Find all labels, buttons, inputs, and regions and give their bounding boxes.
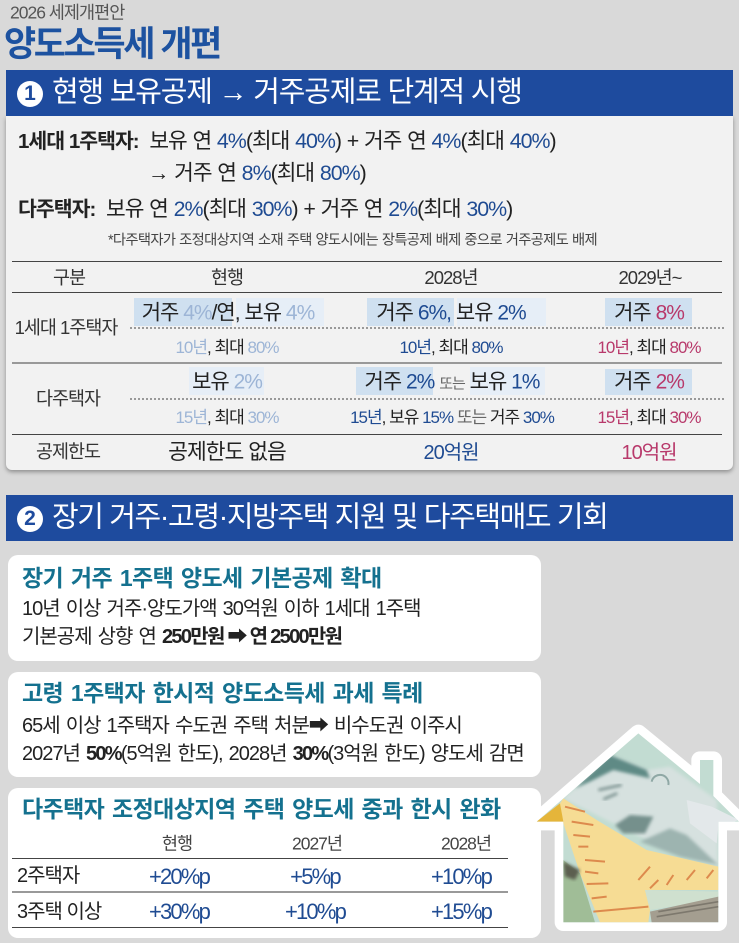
surcharge row label: three or more homes: 3주택 이상 [17, 901, 101, 923]
card: basic deduction [8, 555, 541, 661]
cell: 2029 multi home term: 15년, 최대 30% [597, 408, 701, 427]
surcharge header: 2028: 2028년 [441, 834, 491, 854]
cell: current single home term: 10년, 최대 80% [175, 338, 279, 357]
cell: 2028 single home term: 10년, 최대 80% [399, 338, 503, 357]
section 2 heading: 장기 거주·고령·지방주택 지원 및 다주택매도 기회 [52, 502, 607, 534]
cell: current multi home term: 15년, 최대 30% [175, 408, 279, 427]
section 1 heading: 현행 보유공제 → 거주공제로 단계적 시행 [52, 77, 522, 109]
section 2 header bar [6, 495, 733, 541]
title: 양도소득세 개편 [4, 25, 220, 64]
table header: 2029: 2029년~ [619, 267, 681, 288]
section 1 header bar [6, 70, 733, 116]
card: senior special rule [8, 672, 541, 777]
icon: number 2 [17, 506, 43, 532]
footnote: *다주택자가 조정대상지역 소재 주택 양도시에는 장특공제 배제 중으로 거주공제도 배제 [108, 232, 597, 248]
value: three homes 2027: +10%p [285, 899, 345, 924]
row label: multi home: 다주택자 [36, 388, 100, 409]
card 2 line 2: 2027년 50%(5억원 한도), 2028년 30%(3억원 한도) 양도세 감면 [22, 743, 524, 765]
subtitle: 2026 세제개편안 [10, 2, 124, 22]
cell: 2029 multi home rate: 거주 2% [614, 370, 684, 393]
card 1 line 1: 10년 이상 거주·양도가액 30억원 이하 1세대 1주택 [22, 598, 421, 620]
cell: current multi home rate: 보유 2% [192, 370, 262, 393]
card 1 line 2: 기본공제 상향 연 250만원 ➡ 연 2500만원 [22, 626, 341, 648]
surcharge header: current: 현행 [162, 834, 192, 854]
icon: number 1: 1 [24, 82, 36, 105]
text: single-home result line: → 거주 연 8%(최대 80%) [148, 161, 366, 185]
row label: deduction cap: 공제한도 [36, 441, 100, 462]
panel: section 1 [6, 116, 733, 470]
card 1 heading: 장기 거주 1주택 양도세 기본공제 확대 [22, 565, 382, 591]
cell: 2028 multi home rate: 거주 2% 또는 보유 1% [365, 370, 539, 393]
value: two homes 2027: +5%p [290, 864, 340, 889]
cell: 2028 multi home term: 15년, 보유 15% 또는 거주 30% [350, 408, 554, 427]
text: single-home owner line: 1세대 1주택자: 보유 연 4%(최대 40%) + 거주 연 4%(최대 40%) [18, 129, 556, 153]
surcharge header: 2027: 2027년 [292, 834, 342, 854]
surcharge row label: two homes: 2주택자 [17, 865, 79, 887]
cell: 2028 cap: 20억원 [423, 442, 479, 464]
text: multi-home owner line: 다주택자: 보유 연 2%(최대 30%) + 거주 연 2%(최대 30%) [18, 197, 512, 221]
icon: number 1 [17, 81, 43, 107]
value: two homes 2028: +10%p [431, 864, 491, 889]
cell: current single home rate: 거주 4%/연, 보유 4% [142, 301, 314, 324]
card 2 heading: 고령 1주택자 한시적 양도소득세 과세 특례 [22, 680, 423, 706]
table header: current: 현행 [211, 267, 243, 288]
icon: number 2: 2 [24, 507, 36, 530]
table header: 2028: 2028년 [424, 267, 478, 288]
table header: category: 구분 [53, 267, 85, 288]
value: two homes current: +20%p [149, 864, 209, 889]
cell: 2029 single home term: 10년, 최대 80% [597, 338, 701, 357]
illustration: house with banknote and tape measure [537, 724, 739, 931]
cell: 2028 single home rate: 거주 6%, 보유 2% [376, 301, 526, 324]
value: three homes 2028: +15%p [431, 899, 491, 924]
row label: single home: 1세대 1주택자 [15, 317, 117, 338]
cell: current cap: 공제한도 없음 [168, 440, 286, 464]
cell: 2029 single home rate: 거주 8% [614, 301, 684, 324]
value: three homes current: +30%p [149, 899, 209, 924]
card: multi-home surcharge relief [8, 788, 541, 938]
cell: 2029 cap: 10억원 [621, 442, 677, 464]
card 3 heading: 다주택자 조정대상지역 주택 양도세 중과 한시 완화 [22, 796, 501, 822]
card 2 line 1: 65세 이상 1주택자 수도권 주택 처분➡ 비수도권 이주시 [22, 715, 462, 737]
